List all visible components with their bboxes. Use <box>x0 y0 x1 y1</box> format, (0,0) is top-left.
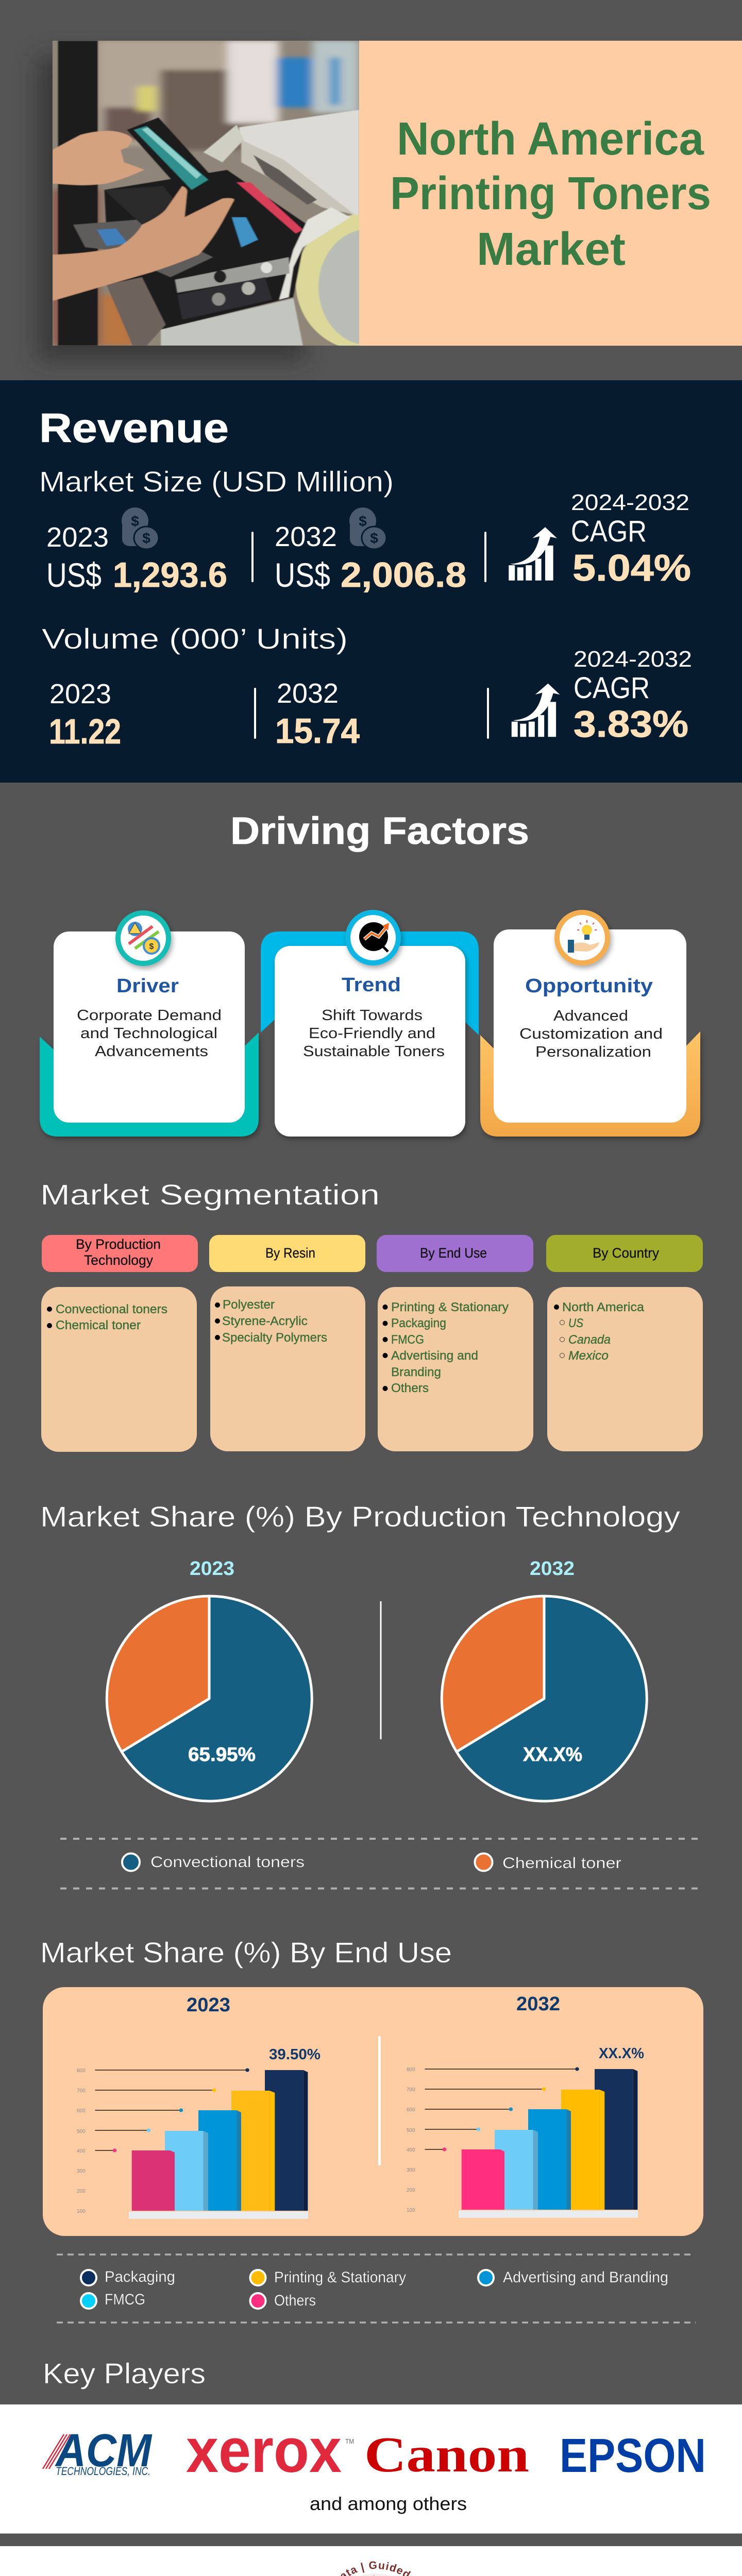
bar chart 2032: 500 <box>407 2128 415 2133</box>
panel: opportunity card: Opportunity <box>525 975 653 997</box>
bar chart 2023: 700 <box>77 2088 86 2094</box>
stat: 2023 revenue <box>46 522 227 595</box>
logo: Epson: EPSON <box>560 2429 706 2482</box>
logo: Xerox: xerox <box>186 2415 342 2485</box>
legend: production technology <box>122 1854 621 1872</box>
heading: key players: Key Players <box>43 2357 206 2389</box>
panel: segment by country: Mexico <box>568 1349 609 1363</box>
divider <box>484 532 486 582</box>
panel: segment by end use <box>377 1235 533 1451</box>
panel: segment by end use: Printing & Stationary <box>391 1300 509 1314</box>
divider <box>254 688 256 739</box>
bar chart 2032: 200 <box>407 2188 415 2193</box>
icon: coins 2023 <box>122 507 159 549</box>
stat: 2023 revenue: 2023 <box>46 522 109 553</box>
stat: 2032 volume: 2032 <box>277 678 339 709</box>
panel: end use charts: 2032 <box>516 1993 560 2015</box>
panel: segment by production technology <box>41 1235 198 1452</box>
legend: end use <box>81 2268 668 2309</box>
stat: revenue cagr: CAGR <box>571 515 647 548</box>
stat: volume cagr: CAGR <box>574 671 650 705</box>
panel: segment by production technology: Technology <box>84 1252 153 1268</box>
text: driver description: Advancements <box>95 1043 208 1060</box>
stat: 2023 volume: 11.22 <box>49 712 121 751</box>
icon: lightbulb over hand <box>568 920 599 953</box>
bar chart 2023: 200 <box>77 2189 86 2194</box>
panel: end use charts: 2023 <box>187 1994 230 2016</box>
logo: Xerox: TM <box>345 2437 354 2445</box>
icon: gears and arrows <box>128 922 159 954</box>
stat: 2023 volume: 2023 <box>49 679 111 709</box>
stat: volume cagr: 3.83% <box>574 704 688 745</box>
legend: end use: Printing & Stationary <box>274 2269 406 2286</box>
pie chart 2032 <box>442 1558 647 1801</box>
divider <box>251 532 254 582</box>
panel: segment by country: US <box>568 1316 583 1330</box>
pie chart 2032: 2032 <box>530 1558 575 1580</box>
icon: coins 2023: $ <box>131 513 139 529</box>
title <box>390 113 711 275</box>
stat: 2032 revenue: US$ <box>275 556 330 594</box>
title: North America <box>397 113 704 165</box>
divider <box>487 688 489 739</box>
heading: market share by end use: Market Share (%) By End Use <box>40 1936 452 1969</box>
bar chart 2032: 300 <box>407 2167 415 2173</box>
panel: trend card: Trend <box>342 974 401 996</box>
panel: opportunity card <box>480 910 700 1137</box>
panel: segment by end use: Packaging <box>391 1316 446 1330</box>
icon: growth arrow revenue <box>509 527 557 581</box>
bar chart 2023: 400 <box>77 2148 86 2154</box>
icon: coins 2032: $ <box>370 530 378 546</box>
bar chart 2023: 600 <box>77 2108 86 2114</box>
stat: volume cagr: 2024-2032 <box>574 647 692 672</box>
panel: segment by country: North America <box>562 1300 645 1314</box>
panel: segment by country: Canada <box>568 1333 611 1347</box>
photo: hands replacing a toner cartridge in a printer <box>53 41 359 346</box>
heading: volume: Volume (000’ Units) <box>42 622 348 655</box>
legend: end use: Advertising and Branding <box>503 2269 668 2286</box>
panel: segment by end use: By End Use <box>420 1245 487 1261</box>
panel: segment by production technology: Chemical toner <box>56 1318 141 1332</box>
title background <box>359 41 742 346</box>
bar chart 2023: 300 <box>77 2168 86 2174</box>
text: trend description: Eco-Friendly and <box>309 1025 435 1042</box>
bar chart 2032: 700 <box>407 2087 415 2093</box>
legend: end use: Packaging <box>105 2268 175 2285</box>
panel: key players logos <box>0 2404 742 2534</box>
divider between pies <box>380 1601 381 1739</box>
text: opportunity description: Advanced <box>553 1008 628 1024</box>
panel: end use charts: 39.50% <box>269 2046 321 2063</box>
stat: revenue cagr: 2024-2032 <box>571 490 689 515</box>
panel: driver card <box>40 910 259 1137</box>
bar chart 2032: 100 <box>407 2208 415 2213</box>
icon: coins 2032 <box>349 507 386 549</box>
pie chart 2023: 2023 <box>190 1558 234 1580</box>
text: driver description: Corporate Demand <box>77 1007 222 1024</box>
legend: production technology: Chemical toner <box>502 1855 621 1872</box>
panel: end use charts <box>43 1987 703 2236</box>
bar chart 2032 <box>407 2067 638 2218</box>
text: and among others: and among others <box>310 2493 467 2514</box>
stat: revenue cagr: 5.04% <box>572 548 691 589</box>
panel: segment by production technology: By Production <box>76 1236 161 1252</box>
text: opportunity description: Personalization <box>535 1044 651 1060</box>
stat: revenue cagr <box>571 490 691 589</box>
panel: segment by end use: Advertising and <box>391 1349 478 1363</box>
heading: market segmentation: Market Segmentation <box>40 1178 380 1211</box>
icon: coins 2023: $ <box>142 530 150 546</box>
panel: segment by resin: Styrene-Acrylic <box>222 1314 308 1328</box>
title: Printing Toners <box>390 168 711 219</box>
panel: segment by end use: FMCG <box>391 1333 424 1347</box>
heading: market share by production technology: Market Share (%) By Production Technology <box>40 1500 680 1533</box>
icon: gears and arrows: $ <box>149 942 154 951</box>
legend: production technology: Convectional toners <box>150 1854 305 1871</box>
pie chart 2023 <box>107 1558 312 1801</box>
stat: 2032 revenue: 2,006.8 <box>341 555 466 595</box>
stat: 2032 revenue <box>275 521 466 595</box>
text: trend description <box>303 1007 445 1060</box>
icon: coins 2032: $ <box>359 513 367 529</box>
text: opportunity description: Customization and <box>519 1026 663 1042</box>
panel: revenue <box>0 380 742 783</box>
legend: end use: Others <box>274 2292 316 2309</box>
bar chart 2023: 500 <box>77 2129 86 2134</box>
stat: 2032 volume: 15.74 <box>275 711 360 751</box>
text: opportunity description <box>519 1008 663 1060</box>
text: driver description: and Technological <box>80 1025 217 1042</box>
bar chart 2032: 600 <box>407 2107 415 2113</box>
logo: ACM Technologies: TECHNOLOGIES, INC. <box>56 2465 150 2478</box>
heading: revenue: Revenue <box>39 405 229 451</box>
panel: end use charts: XX.X% <box>599 2045 644 2062</box>
bar chart 2023: 800 <box>77 2068 86 2074</box>
bar chart 2023: 100 <box>77 2209 86 2214</box>
panel: segment by resin: Polyester <box>223 1298 275 1312</box>
panel: segment by resin: Specialty Polymers <box>222 1331 327 1345</box>
icon: magnifier with trend arrow <box>359 922 389 952</box>
panel: trend card <box>261 910 479 1137</box>
panel: segment by production technology: Convectional toners <box>56 1302 167 1316</box>
pie chart 2032: XX.X% <box>523 1744 582 1766</box>
heading: market size: Market Size (USD Million) <box>39 465 394 498</box>
stat: 2023 volume <box>49 679 121 751</box>
text: driver description <box>77 1007 222 1060</box>
icon: growth arrow volume <box>512 684 560 737</box>
bar chart 2032: 800 <box>407 2067 415 2073</box>
stat: 2032 revenue: 2032 <box>275 521 337 552</box>
logo: ACM Technologies: ACM <box>55 2425 153 2477</box>
bar chart 2032: 400 <box>407 2147 415 2153</box>
stat: 2032 volume <box>275 678 360 751</box>
text: trend description: Shift Towards <box>322 1007 423 1024</box>
text: trend description: Sustainable Toners <box>303 1043 445 1060</box>
title: Market <box>477 224 626 275</box>
panel: driver card: Driver <box>116 975 179 997</box>
logo: Canon: Canon <box>364 2427 529 2483</box>
pie chart 2023: 65.95% <box>188 1744 256 1766</box>
heading: driving factors: Driving Factors <box>230 809 529 852</box>
panel: segment by country: By Country <box>593 1245 659 1261</box>
header banner <box>37 38 742 361</box>
panel: segment by end use: Branding <box>391 1365 441 1379</box>
panel: segment by resin <box>209 1235 365 1451</box>
bar chart 2023 <box>77 2068 308 2219</box>
panel: segment by end use: Others <box>391 1381 429 1395</box>
stat: 2023 revenue: 1,293.6 <box>113 555 227 595</box>
stat: 2023 revenue: US$ <box>46 556 102 594</box>
stat: volume cagr <box>574 647 692 745</box>
panel: segment by country <box>546 1235 703 1451</box>
legend: end use: FMCG <box>105 2291 145 2308</box>
logo: Astute Analytica <box>341 2562 411 2576</box>
panel: segment by resin: By Resin <box>265 1245 315 1261</box>
